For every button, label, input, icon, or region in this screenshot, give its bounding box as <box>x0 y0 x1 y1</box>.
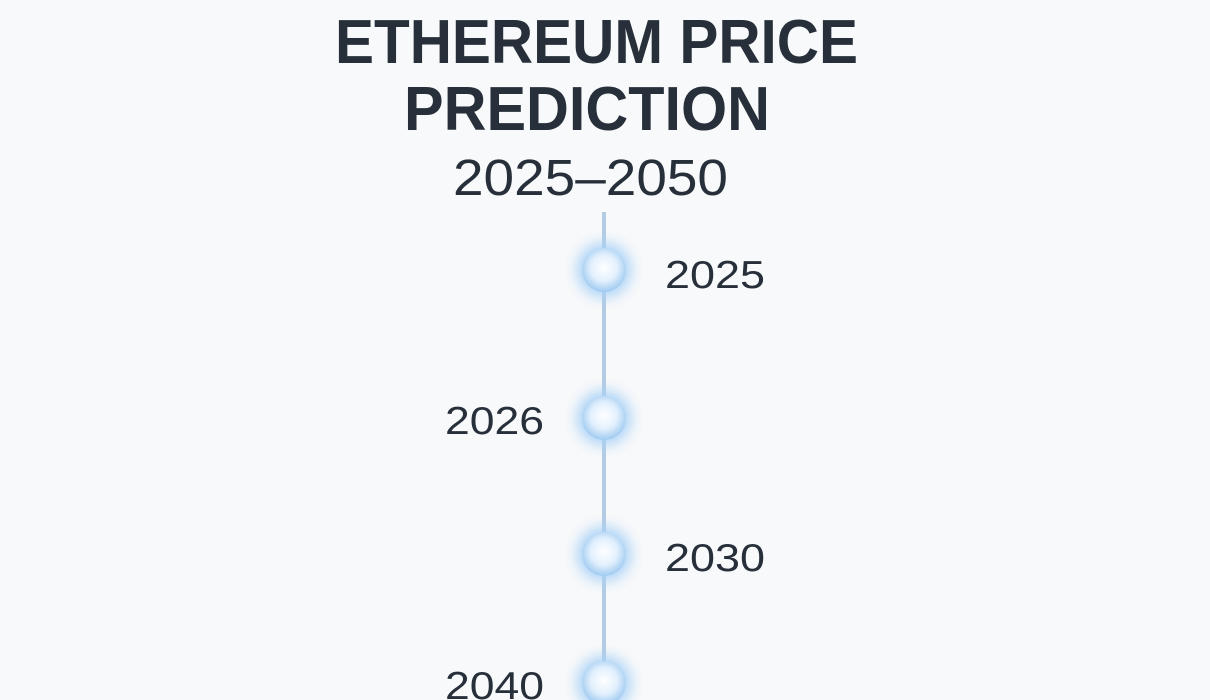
timeline line <box>602 212 606 700</box>
label: 2026: 2026 <box>445 400 544 443</box>
node: 2040 <box>577 656 631 700</box>
title <box>335 8 858 144</box>
title: PREDICTION <box>404 75 770 144</box>
label: 2030: 2030 <box>665 537 765 580</box>
node: 2026 <box>577 391 631 445</box>
title: ETHEREUM PRICE <box>335 8 858 77</box>
node: 2025 <box>577 243 631 297</box>
node: 2030 <box>577 527 631 581</box>
subtitle: 2025–2050 <box>453 149 728 206</box>
label: 2025: 2025 <box>665 254 765 297</box>
